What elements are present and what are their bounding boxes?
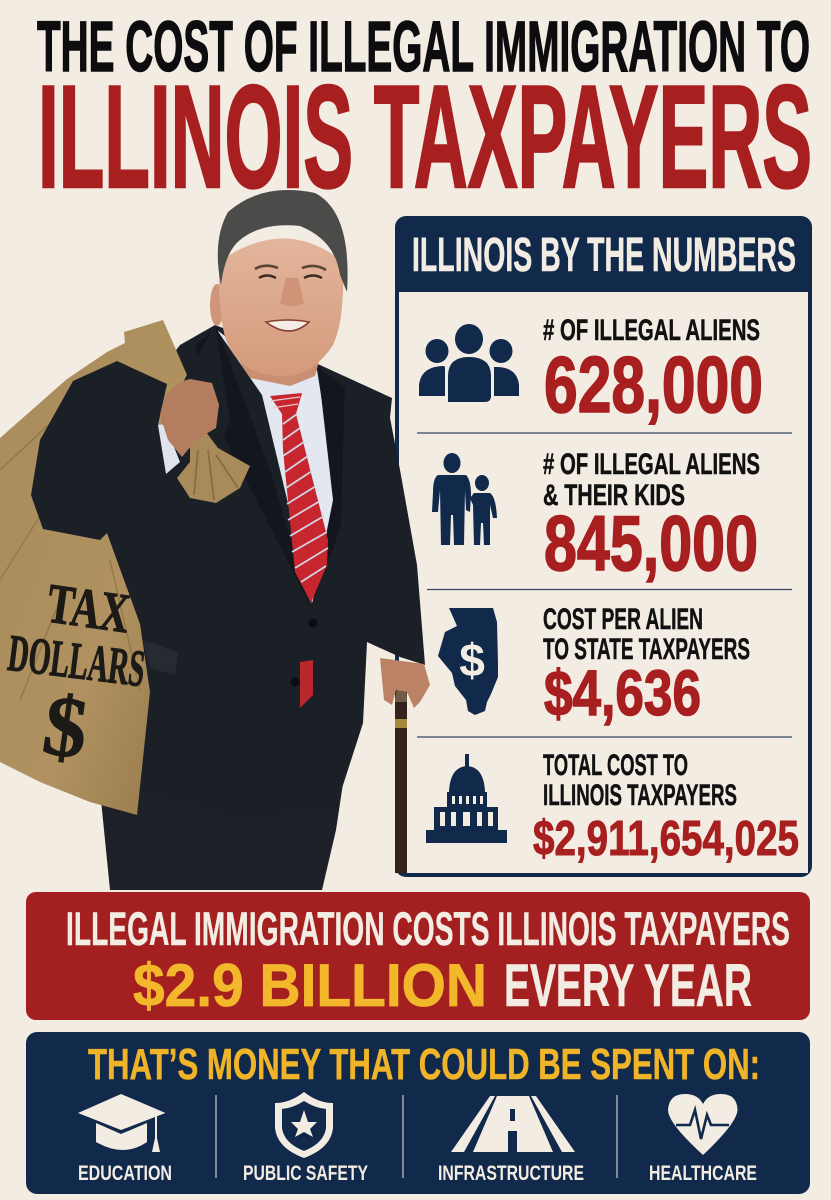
brows and eyes	[255, 266, 326, 270]
lapels	[195, 328, 362, 605]
trousers	[98, 770, 345, 890]
hair	[218, 190, 348, 292]
banner background	[26, 892, 810, 1020]
banner: annual cost	[26, 892, 810, 1020]
icon: adult and child	[432, 453, 497, 545]
pockets	[143, 485, 387, 675]
panel background	[26, 1032, 810, 1194]
tie	[270, 393, 328, 708]
shirt cuff	[158, 424, 180, 474]
stat: illegal aliens and kids: & THEIR KIDS	[543, 479, 685, 512]
stat: illegal aliens	[419, 314, 763, 429]
nose	[280, 278, 304, 306]
icon: Illinois map with dollar	[438, 608, 498, 715]
value: 628,000	[544, 340, 763, 429]
item: education	[78, 1094, 172, 1185]
smile	[266, 320, 309, 331]
jacket body	[60, 325, 392, 815]
jacket right sleeve	[340, 380, 425, 665]
icon: heart with pulse	[668, 1094, 738, 1155]
icon: shield with star	[275, 1092, 333, 1158]
illustration: governor carrying tax dollars bag	[0, 190, 392, 890]
stat: total cost	[426, 749, 799, 866]
item: public safety	[243, 1092, 368, 1185]
bag text: DOLLARS	[5, 625, 148, 698]
bag text	[5, 573, 148, 777]
panel: Illinois by the numbers	[395, 216, 812, 877]
money bag sack	[0, 320, 187, 815]
stat: illegal aliens and kids	[432, 448, 760, 587]
label: COST PER ALIEN	[543, 603, 703, 636]
neck shadow	[232, 350, 322, 386]
label: HEALTHCARE	[649, 1162, 757, 1185]
panel frame	[395, 216, 812, 877]
value: $4,636	[544, 657, 701, 729]
icon: road	[451, 1096, 575, 1152]
ear	[210, 284, 224, 326]
label: TOTAL COST TO	[543, 749, 688, 782]
banner amount: $2.9 BILLION	[133, 952, 487, 1019]
stat: cost per alien	[438, 603, 750, 729]
jacket arm over bag	[31, 361, 178, 540]
panel: money could be spent on	[26, 1032, 810, 1194]
label: INFRASTRUCTURE	[438, 1162, 584, 1185]
icon: graduation cap	[78, 1094, 166, 1152]
face	[219, 238, 343, 376]
value: 845,000	[544, 499, 758, 587]
bag text: TAX	[44, 573, 133, 645]
left hand on cane	[380, 658, 430, 708]
shirt	[217, 330, 337, 603]
item: infrastructure	[438, 1096, 584, 1185]
icon: Illinois map with dollar: $	[459, 634, 485, 686]
bag text: $	[38, 676, 94, 777]
icon: capitol building	[426, 754, 507, 843]
title	[37, 8, 812, 218]
bag tail	[177, 432, 250, 503]
label: EDUCATION	[78, 1162, 172, 1185]
cane	[395, 685, 407, 873]
column dividers	[216, 1095, 617, 1178]
head	[210, 190, 348, 386]
hand on bag	[160, 379, 219, 457]
label: PUBLIC SAFETY	[243, 1162, 368, 1185]
item: healthcare	[649, 1094, 757, 1185]
icon: group of people	[419, 324, 519, 402]
illustration: right arm and cane overlapping panel	[340, 380, 430, 873]
buttons	[290, 618, 318, 686]
